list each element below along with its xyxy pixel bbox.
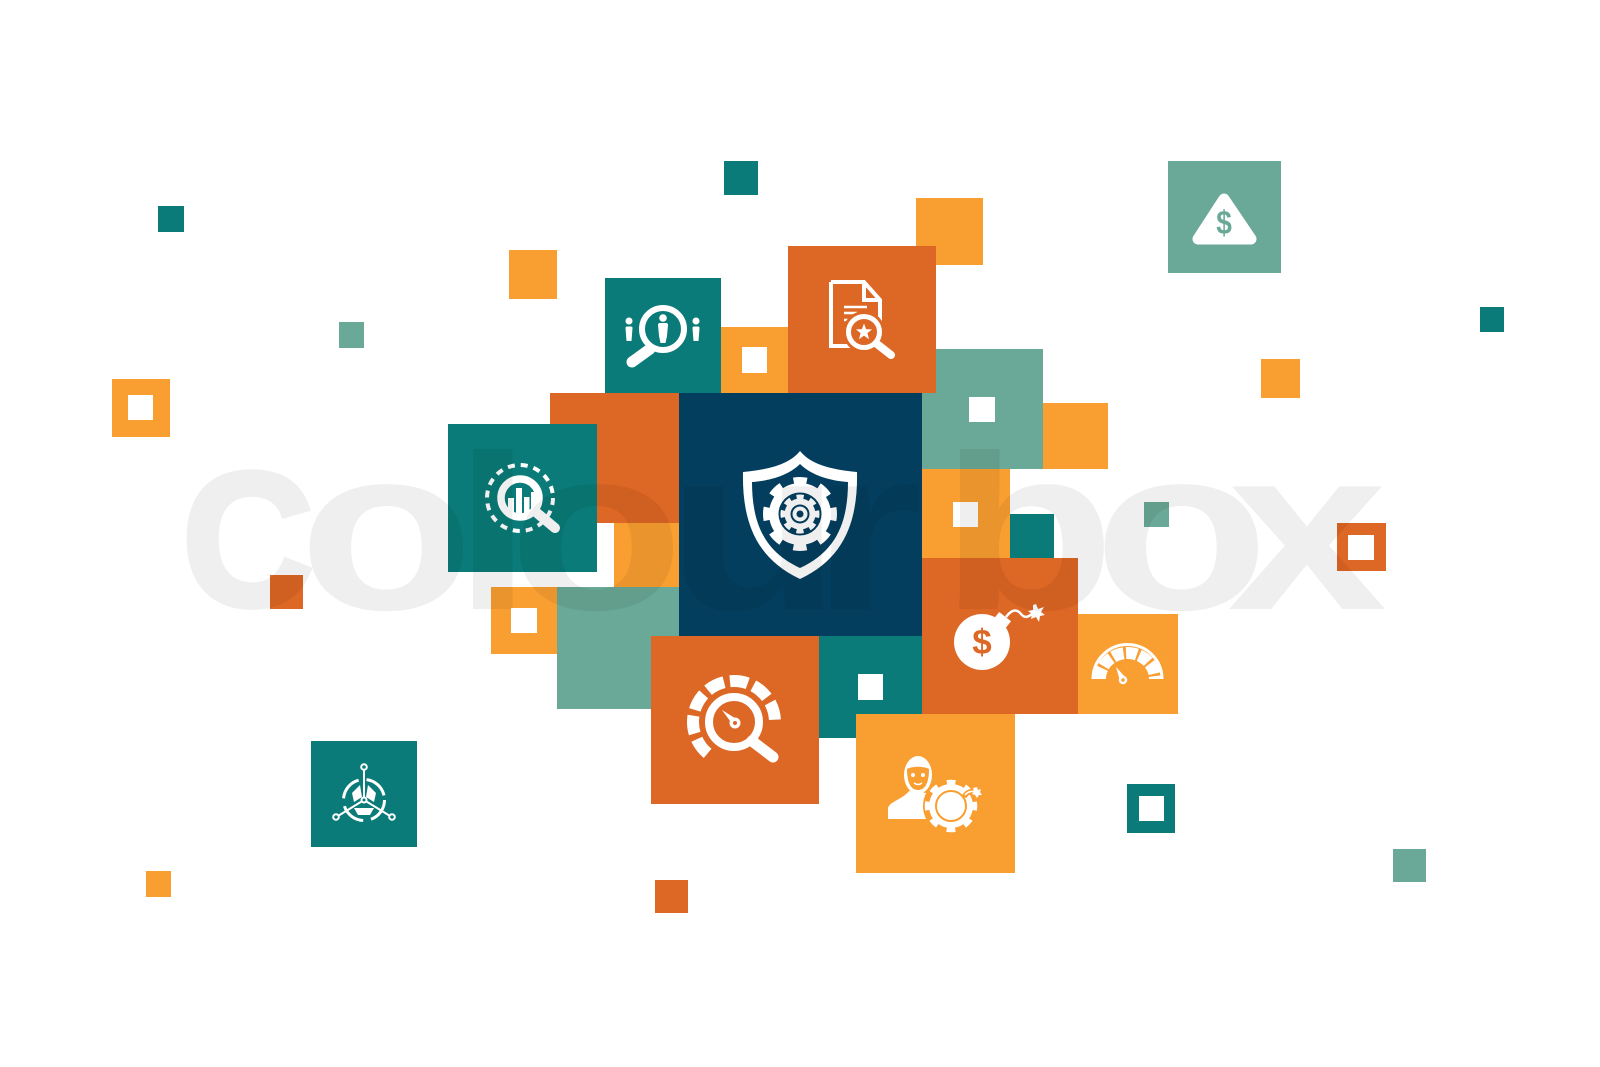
- panel: chart magnifier tile: [448, 424, 597, 572]
- panel: orange square right of sage tile: [1043, 403, 1108, 469]
- panel: document review tile: [788, 246, 936, 393]
- panel: orange square below dark orange: [614, 523, 679, 587]
- icon: magnifier with people: [626, 308, 700, 362]
- icon: person with gear: [888, 756, 982, 834]
- decorative square: teal far right: [1480, 307, 1504, 332]
- watermark: Colourbox: olourbox: [298, 399, 1389, 659]
- icon: shield with gear: [743, 451, 857, 579]
- decorative hollow square: dark orange right: [1337, 523, 1386, 571]
- icon: speedometer: [1093, 644, 1162, 683]
- panel: speedometer tile: [1078, 614, 1178, 714]
- panel: orange tile with white square lower left: [491, 587, 557, 654]
- decorative square: orange right: [1261, 359, 1300, 398]
- panel: dark orange square behind chart tile: [550, 393, 679, 523]
- decorative hollow square: orange left: [112, 379, 170, 437]
- panel: financial risk bomb tile: [922, 558, 1078, 714]
- panel: teal tile with white square below navy: [819, 636, 922, 738]
- icon: document with star magnifier: [831, 282, 891, 355]
- decorative square: sage upper left: [339, 322, 364, 348]
- watermark: Colourbox: [186, 449, 1385, 611]
- panel: central navy tile: [679, 393, 922, 636]
- decorative square: sage lower right: [1393, 849, 1426, 882]
- decorative square: dark orange bottom: [655, 880, 688, 913]
- panel: orange square behind document tile: [916, 198, 983, 265]
- panel: orange tile with white square: [922, 469, 1010, 558]
- panel: sage square lower left: [557, 587, 679, 709]
- infographic canvas: [112, 161, 1504, 913]
- decorative square: sage over watermark: [1144, 502, 1169, 527]
- panel: orange tile with white square top: [721, 327, 788, 393]
- decorative square: orange bottom left: [146, 871, 171, 897]
- watermark: Colourbox: C: [182, 434, 314, 646]
- panel: person and gear tile: [856, 714, 1015, 873]
- decorative square: orange upper left: [509, 250, 557, 299]
- panel: small teal square: [1010, 514, 1054, 558]
- decorative square: teal top: [724, 161, 758, 195]
- panel: process tile: [311, 741, 417, 847]
- panel: gauge magnifier tile: [651, 636, 819, 804]
- icon: triangle with dollar: $: [1216, 205, 1232, 242]
- decorative square: teal top left: [158, 206, 184, 232]
- icon: bomb with dollar sign: [954, 604, 1045, 670]
- icon: three-way gear cycle: [333, 764, 395, 820]
- icon: magnifier with bar chart: [487, 465, 555, 531]
- panel: warning dollar tile: [1168, 161, 1281, 273]
- decorative square: dark orange left: [270, 575, 303, 609]
- panel: people search tile: [605, 278, 721, 393]
- icon: bomb with dollar sign: $: [972, 623, 992, 662]
- panel: sage tile with white square: [922, 349, 1043, 469]
- decorative hollow square: teal lower right: [1127, 784, 1175, 833]
- icon: magnifier with dial: [676, 664, 792, 780]
